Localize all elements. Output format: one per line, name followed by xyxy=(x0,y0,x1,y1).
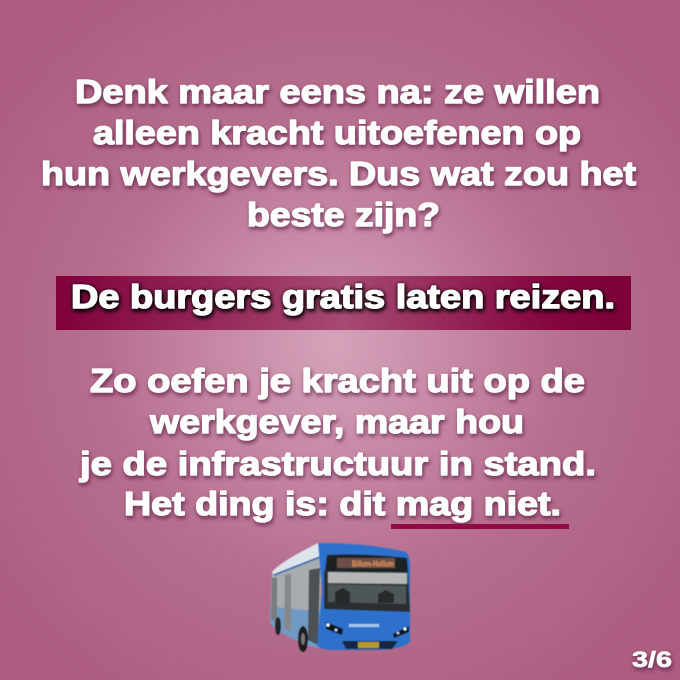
bus wheels xyxy=(275,617,281,635)
bus front lettering xyxy=(349,624,379,627)
bus side body xyxy=(270,552,322,648)
banner: free travel xyxy=(56,276,631,330)
text block: opening question: alleen kracht uitoefenen op xyxy=(93,115,581,152)
text block: explanation xyxy=(79,363,596,523)
text block: opening question: hun werkgevers. Dus wat zou het xyxy=(41,156,636,193)
banner: free travel: De burgers gratis laten reizen. xyxy=(71,279,615,316)
text block: explanation: Het ding is: dit mag niet. xyxy=(124,486,561,523)
bus destination panel: Billum-Hollum xyxy=(352,558,394,568)
underline: mag niet xyxy=(391,524,569,529)
bus side lower blue xyxy=(270,606,320,648)
icon: blue bus xyxy=(270,543,410,652)
bus passengers xyxy=(335,588,394,603)
text block: opening question: beste zijn? xyxy=(247,197,440,234)
text block: explanation: Zo oefen je kracht uit op de xyxy=(90,363,585,400)
bus headlights xyxy=(326,622,343,635)
bus roof xyxy=(272,543,322,575)
bus windscreen xyxy=(324,571,410,612)
bus front xyxy=(317,543,410,650)
bus side doors xyxy=(271,577,277,624)
text block: explanation: je de infrastructuur in stand. xyxy=(79,446,596,483)
page number: 3/6 xyxy=(632,647,672,672)
text block: opening question xyxy=(41,74,636,234)
text block: explanation: werkgever, maar hou xyxy=(149,404,524,441)
bus bumper and number plate xyxy=(342,641,398,649)
text block: opening question: Denk maar eens na: ze willen xyxy=(75,74,600,111)
